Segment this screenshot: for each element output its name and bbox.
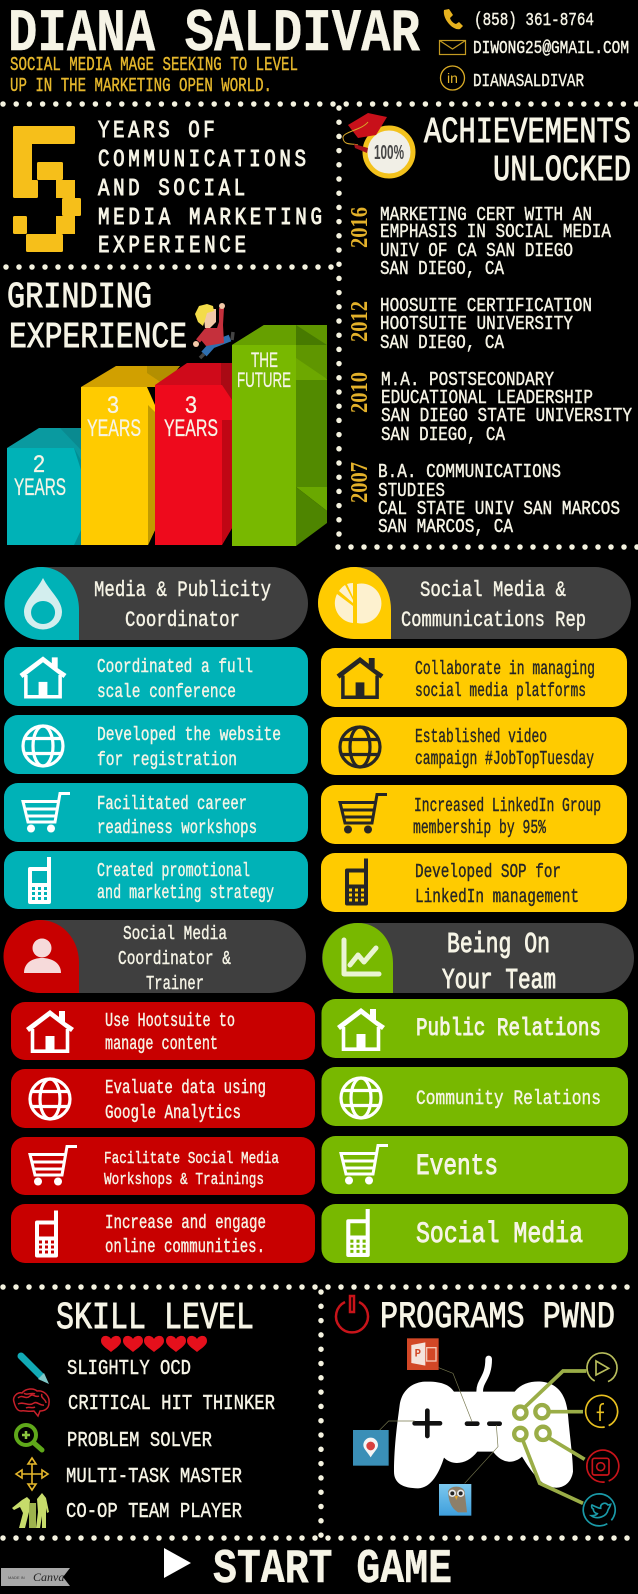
made in canva badge: MADE IN [8,1575,25,1580]
year 2016: 2016 [347,207,373,248]
card: workshops: readiness workshops [97,817,257,839]
card: communities: online communities. [105,1236,265,1258]
details 2010: SAN DIEGO, CA [381,424,505,446]
experience staircase chart [7,303,327,546]
card: social media [322,1204,628,1263]
made in canva badge: Canva [33,1570,64,1584]
icon: zombie team [12,1493,49,1528]
year 2010: 2010 [347,372,373,413]
details 2012 [380,295,592,354]
card: video campaign: Established video [415,726,547,748]
years of experience text: YEARS OF [98,117,215,145]
year 2012: 2012 [347,301,373,342]
skill: multi-task master: MULTI-TASK MASTER [66,1466,242,1489]
bar: 3 years red [155,363,232,545]
card: workshops: Facilitated career [97,793,247,815]
card: conference: Coordinated a full [97,656,253,678]
card: video campaign [321,717,627,775]
details 2007 [378,461,620,538]
card: analytics [11,1069,315,1128]
years of experience text [98,117,322,260]
bar: the future: FUTURE [237,369,291,392]
card: social media: Social Media [416,1218,583,1252]
bar: 2 years [7,428,81,545]
header pill: Trainer [146,973,204,995]
card: trainings: Facilitate Social Media [104,1150,279,1169]
details 2010: M.A. POSTSECONDARY [381,369,555,391]
icon: hootsuite owl [439,1484,471,1516]
card: communities [11,1204,315,1263]
icon: running pixel character [193,303,233,358]
hearts [101,1336,207,1352]
title: name: DIANA SALDIVAR [8,1,420,69]
header pill: Media & Publicity [94,578,271,603]
details 2007: B.A. COMMUNICATIONS [378,461,561,483]
header pill: Coordinator & [118,948,231,970]
icon: twitter circle [583,1494,615,1526]
card: website: Developed the website [97,724,281,746]
header pill: Social Media & [420,578,566,603]
skill: problem solver: PROBLEM SOLVER [67,1430,212,1453]
skill: co-op team player: CO-OP TEAM PLAYER [66,1501,242,1524]
header pill [318,567,631,639]
card: public relations [322,999,628,1058]
card: workshops [4,783,308,842]
card: hootsuite [11,1002,315,1060]
years of experience text: AND SOCIAL [98,175,245,203]
header pill [322,923,634,997]
years of experience text: MEDIA MARKETING [98,204,322,232]
card: marketing strategy [4,851,308,909]
card: marketing strategy: Created promotional [97,860,250,882]
card: trainings [11,1137,315,1195]
header pill: Your Team [442,964,556,997]
details 2012: SAN DIEGO, CA [380,332,504,354]
card: hootsuite: manage content [105,1033,218,1055]
big pixel number 5 [13,126,81,252]
panel: being on your team [322,923,634,1263]
details 2010: EDUCATIONAL LEADERSHIP [381,387,593,409]
heading: grinding experience [7,277,187,358]
icon: power button [336,1296,368,1332]
card: linkedin sop: Developed SOP for [415,861,561,883]
header pill [4,567,308,640]
icon: linkedin: in [447,70,458,86]
details 2016: MARKETING CERT WITH AN [380,204,592,226]
connector lines [380,1368,498,1483]
icon: magnifying glass [16,1425,42,1450]
header pill: Being On [447,928,550,961]
years of experience text: COMMUNICATIONS [98,146,306,174]
icon: phone [444,9,463,29]
bar: 3 years red: 3 [185,392,197,419]
linkedin handle: DIANASALDIVAR [473,72,584,92]
card: marketing strategy: and marketing strategy [97,882,274,904]
icon: linkedin [440,66,464,90]
skill: slightly ocd: SLIGHTLY OCD [67,1358,191,1381]
card: website [4,715,308,774]
card: linkedin sop [321,853,627,912]
header pill: Social Media [123,923,227,945]
bar: 3 years yellow [81,366,180,545]
panel: social media and communications rep [318,567,631,912]
years of experience text: EXPERIENCE [98,232,246,260]
details 2007: SAN MARCOS, CA [378,516,513,538]
panel: skill level [12,1297,275,1528]
card: linkedin group [321,785,627,844]
icon: periscope [353,1430,389,1466]
icon: pen [21,1356,49,1384]
card: conference [4,647,308,706]
achievement 2016 [347,204,611,280]
heading: grinding experience: GRINDING [7,277,152,318]
bar: the future: THE [251,349,278,372]
card: communities: Increase and engage [105,1212,266,1234]
panel: media and publicity coordinator [4,567,308,909]
heading: skill level: SKILL LEVEL [56,1297,254,1340]
card: trainings: Workshops & Trainings [104,1171,264,1190]
card: community relations [322,1067,628,1126]
details 2012: HOOSUITE CERTIFICATION [380,295,592,317]
contact details [440,9,629,92]
tagline [10,54,298,97]
icon: play circle [587,1353,617,1382]
card: community relations: Community Relations [416,1088,601,1111]
card: linkedin group: membership by 95% [413,817,546,839]
icon: instagram circle [587,1450,619,1482]
card: analytics: Google Analytics [105,1102,241,1124]
icon: play triangle [164,1548,191,1578]
heading: grinding experience: EXPERIENCE [9,317,187,358]
tagline: SOCIAL MEDIA MAGE SEEKING TO LEVEL [10,54,298,76]
bar: 3 years yellow: 3 [107,392,119,419]
card: website: for registration [97,749,237,771]
achievement 2012 [347,295,592,354]
skill: critical hit thinker: CRITICAL HIT THINKER [68,1393,275,1416]
controller body [394,1359,573,1488]
made in canva badge [1,1568,70,1586]
icon: graduation cap with 100 percent badge [343,113,413,176]
card: social platforms [321,648,627,707]
achievement 2010 [347,369,633,446]
icon: powerpoint [407,1338,439,1370]
header pill: Communications Rep [401,608,586,633]
icon: envelope [440,40,466,54]
card: events: Events [416,1150,498,1184]
game controller [353,1338,619,1526]
bar: 3 years yellow: YEARS [87,415,141,442]
details 2016 [380,204,611,280]
heading: achievements unlocked [424,112,631,191]
year 2007: 2007 [347,462,373,503]
panel: social media coordinator and trainer [3,920,315,1263]
details 2010 [381,369,633,446]
card: analytics: Evaluate data using [105,1077,266,1099]
card: linkedin sop: LinkedIn management [415,886,579,908]
button wires [514,1371,586,1503]
icon: four-way arrows [16,1458,48,1490]
details 2007: STUDIES [378,480,445,502]
details 2016: SAN DIEGO, CA [380,258,504,280]
header pill [3,920,306,995]
icon: powerpoint: P [415,1349,421,1361]
icon: brain [14,1389,49,1416]
card: events [322,1136,628,1194]
bar: 2 years: YEARS [14,474,66,501]
achievement 2007 [347,461,620,538]
details 2012: HOOTSUITE UNIVERSITY [380,313,573,335]
panel: programs pwnd [336,1296,619,1526]
card: hootsuite: Use Hootsuite to [105,1010,235,1032]
icon: facebook circle [586,1395,618,1427]
header pill: Coordinator [125,608,240,633]
phone number: (858) 361-8764 [474,11,594,31]
tagline: UP IN THE MARKETING OPEN WORLD. [10,75,272,97]
bar: 3 years red: YEARS [164,415,218,442]
bar: the future [232,325,327,546]
bar: 2 years: 2 [33,451,45,478]
details 2016: UNIV OF CA SAN DIEGO [380,240,573,262]
icon: graduation cap with 100 percent badge: 100% [374,142,404,164]
card: conference: scale conference [97,681,236,703]
